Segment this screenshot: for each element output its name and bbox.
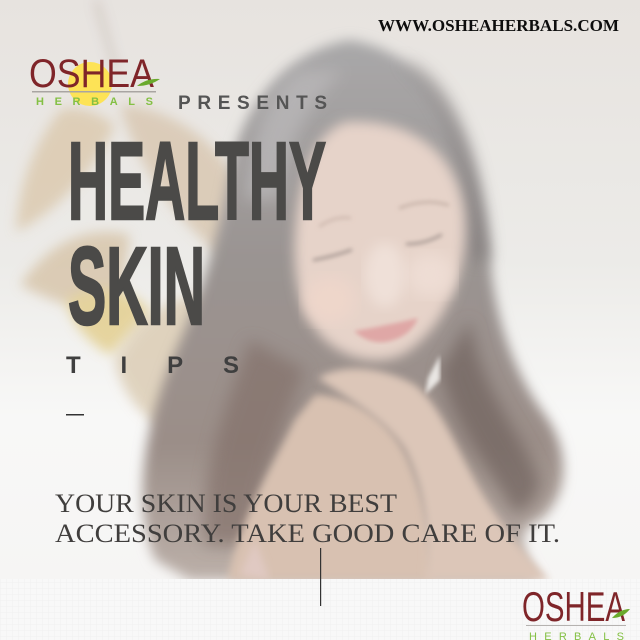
tagline: YOUR SKIN IS YOUR BEST (55, 489, 397, 518)
logo: Oshea Herbals top: OSHEA (29, 52, 154, 96)
photo: shoulder (228, 395, 432, 580)
photo: autumn leaves (16, 0, 235, 430)
photo: eyes and brows (314, 202, 448, 260)
presents label: PRESENTS (178, 93, 327, 114)
tagline (55, 489, 560, 548)
short dash (66, 414, 84, 416)
photo: lips (354, 318, 418, 342)
logo: Oshea Herbals top: HERBALS (36, 96, 153, 108)
tagline: ACCESSORY. TAKE GOOD CARE OF IT. (55, 519, 560, 548)
photo: face (294, 122, 465, 360)
bottom patterned band (0, 579, 640, 640)
photo: yellow sun behind logo (68, 62, 112, 106)
website url: WWW.OSHEAHERBALS.COM (378, 16, 619, 35)
subtitle: tips: TIPS (66, 352, 239, 379)
photo: arm and hands (318, 369, 550, 580)
title: healthy skin: HEALTHY (68, 120, 326, 243)
title: healthy skin (68, 120, 326, 348)
photo: dark hair strands (204, 60, 540, 545)
photo: woman (143, 40, 563, 580)
photo: hair (143, 40, 563, 580)
vertical rule (320, 548, 321, 606)
title: healthy skin: SKIN (68, 225, 205, 348)
photo: neck gap highlight (425, 355, 440, 395)
